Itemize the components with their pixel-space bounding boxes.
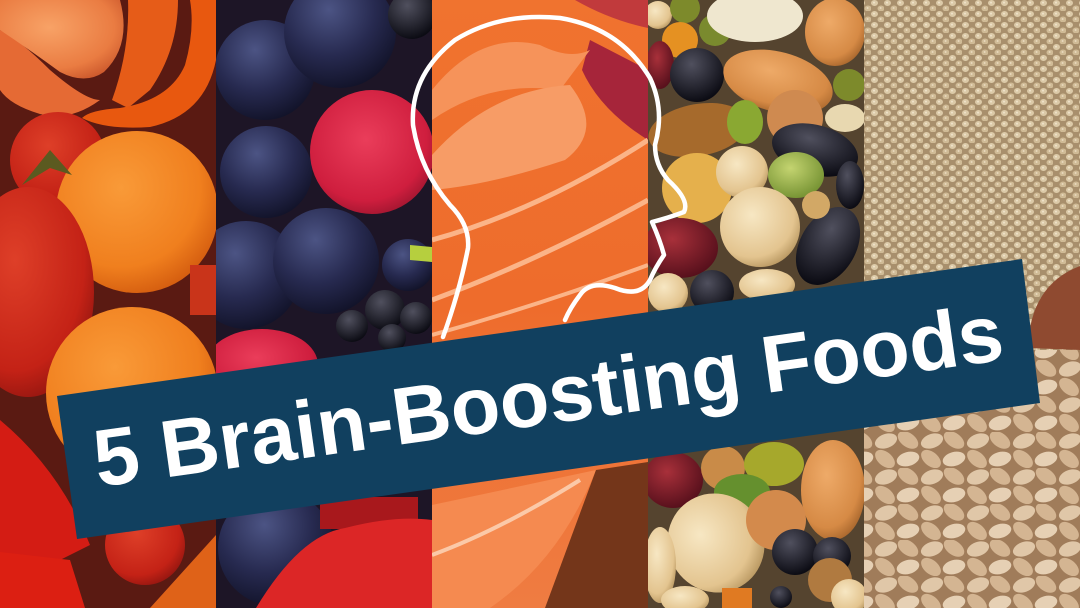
panel: blueberries and raspberries [216, 0, 432, 608]
panel: mixed beans [642, 0, 873, 608]
icon: head profile outline [413, 17, 685, 337]
banner [57, 259, 1040, 539]
title: 5 Brain-Boosting Foods [88, 288, 1009, 505]
panel: orange and red fruit and vegetables [0, 0, 218, 608]
panel: salmon [432, 0, 648, 608]
panel: quinoa and brown rice [864, 0, 1080, 608]
